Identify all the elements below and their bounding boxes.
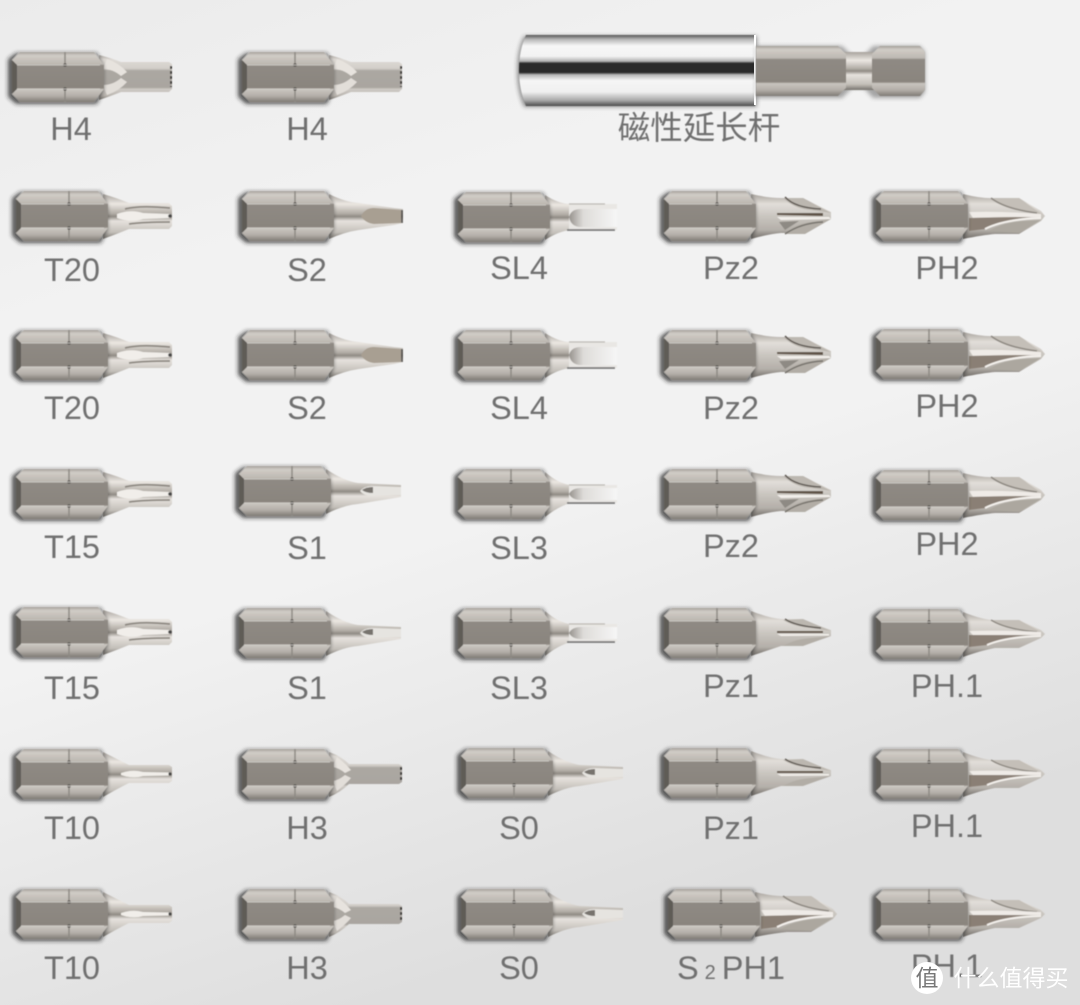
bit: S2: S2 xyxy=(287,252,327,288)
bit: SL3: SL3 xyxy=(490,670,548,706)
bit: T20 xyxy=(12,330,172,426)
bit: S0 xyxy=(457,889,623,986)
bit: H3: H3 xyxy=(286,950,328,986)
bit: Pz2 xyxy=(660,330,831,426)
bit: T10 xyxy=(12,749,172,846)
bit: Pz1 xyxy=(660,748,831,846)
bit: Pz2 xyxy=(660,191,831,286)
magnetic extension rod xyxy=(517,35,925,146)
bit: Pz2: Pz2 xyxy=(703,528,759,564)
bit: T20: T20 xyxy=(44,252,100,288)
bit: S2 xyxy=(238,330,403,426)
bit: PH2 xyxy=(872,191,1045,286)
bit: H3: H3 xyxy=(286,810,328,846)
bit: PH2: PH2 xyxy=(915,526,979,562)
bit: SL3 xyxy=(454,469,617,566)
bit: H4: H4 xyxy=(50,111,92,147)
bit: PH.1 xyxy=(872,889,1045,984)
bit: T15 xyxy=(12,607,172,706)
bit: PH.1: PH.1 xyxy=(911,948,983,984)
bit: H4 xyxy=(238,52,402,147)
bit: PH.1 xyxy=(872,749,1045,844)
bit: T10: T10 xyxy=(44,950,100,986)
bit: T10 xyxy=(12,889,172,986)
bit: S1 xyxy=(235,466,401,566)
bit: H4 xyxy=(8,52,172,147)
bit: S1 xyxy=(235,608,401,706)
bit: PH.1 xyxy=(872,609,1045,704)
bit: T15: T15 xyxy=(44,670,100,706)
bit: S2: S2 xyxy=(287,390,327,426)
bit: H3 xyxy=(238,889,402,986)
bit: SL4: SL4 xyxy=(490,250,548,286)
bit: Pz2: Pz2 xyxy=(703,390,759,426)
bit: Pz1: Pz1 xyxy=(703,668,759,704)
bit: SL3: SL3 xyxy=(490,530,548,566)
bit: PH.1: PH.1 xyxy=(911,808,983,844)
bit: SL4 xyxy=(454,330,617,426)
watermark: 值 xyxy=(916,965,938,991)
bit: PH2 xyxy=(872,329,1045,424)
bit: S0: S0 xyxy=(499,950,539,986)
watermark xyxy=(911,962,1068,994)
bit: T15 xyxy=(12,469,172,565)
bit: T10: T10 xyxy=(44,810,100,846)
bit: SL3 xyxy=(454,608,617,706)
bit: S2 PH1: S 2PH1 xyxy=(677,950,785,986)
bit: PH2: PH2 xyxy=(915,250,979,286)
bit: SL4: SL4 xyxy=(490,390,548,426)
bit: Pz2: Pz2 xyxy=(703,250,759,286)
bit: PH2 xyxy=(872,470,1045,562)
label: extension rod: 磁性延长杆 xyxy=(618,110,780,146)
bit: S0: S0 xyxy=(499,810,539,846)
bit: S2 xyxy=(238,191,403,288)
bit: PH2: PH2 xyxy=(915,388,979,424)
bit: SL4 xyxy=(454,192,617,286)
bit: T20 xyxy=(12,191,172,288)
bit: Pz1: Pz1 xyxy=(703,810,759,846)
bit: T20: T20 xyxy=(44,390,100,426)
bit: H3 xyxy=(238,749,402,846)
bit: H4: H4 xyxy=(286,111,328,147)
bit: S1: S1 xyxy=(287,670,327,706)
bit: Pz1 xyxy=(660,608,831,704)
bit: T15: T15 xyxy=(44,529,100,565)
watermark: 什么值得买 xyxy=(954,965,1068,991)
bit: Pz2 xyxy=(660,469,831,564)
bit: PH.1: PH.1 xyxy=(911,668,983,704)
bit: S1: S1 xyxy=(287,530,327,566)
bit: S2 PH1 xyxy=(664,889,837,986)
bit: S0 xyxy=(457,748,623,846)
